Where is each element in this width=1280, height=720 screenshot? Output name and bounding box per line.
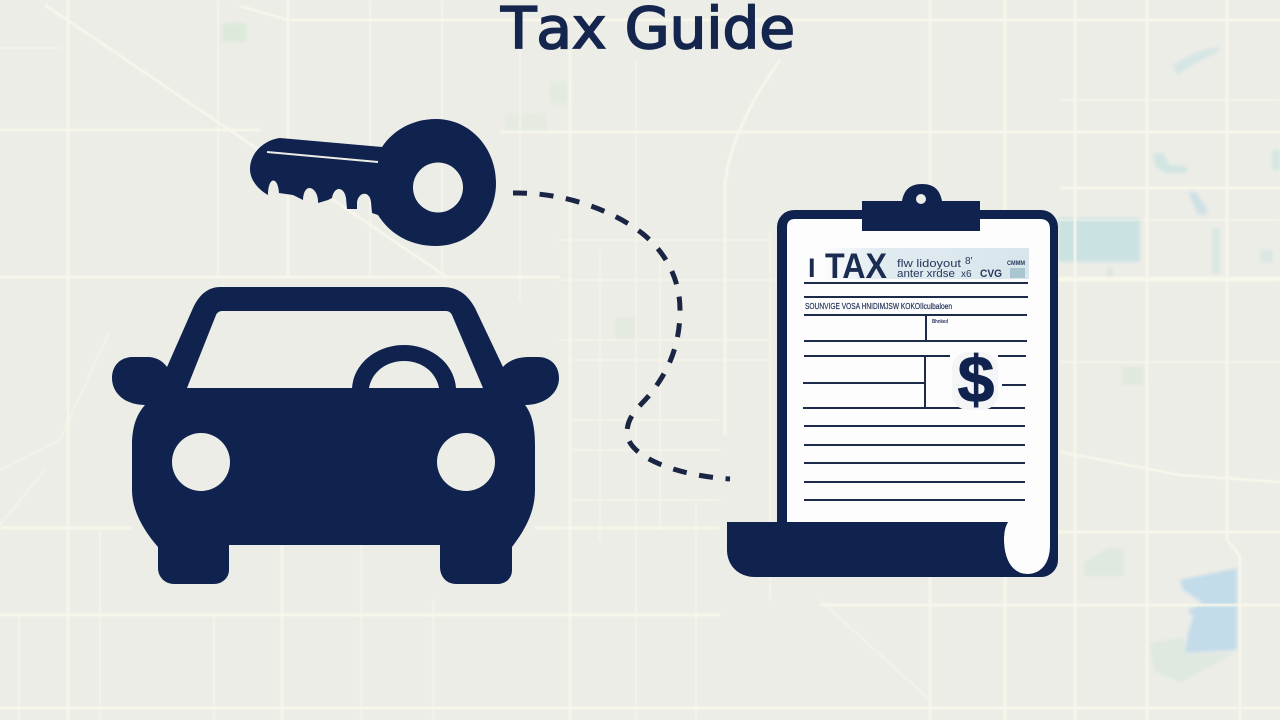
icon: clipboard with tax form (727, 184, 1058, 577)
arrow: dashed path from key to tax form (513, 193, 730, 479)
form header text: CMMM (1007, 261, 1025, 267)
form header text (897, 256, 1025, 280)
icon: car (112, 287, 559, 584)
form lines (803, 283, 1028, 500)
form header text: 8' (965, 256, 973, 267)
form header band (820, 248, 1029, 279)
form label: Bhnked (932, 319, 948, 325)
form header text: x6 (961, 269, 972, 280)
tax word: TAX (825, 247, 888, 286)
clipboard board (777, 210, 1058, 577)
form header text: CVG (980, 268, 1002, 280)
paper curl base (727, 522, 1027, 577)
form header text: flw lidoyout (897, 258, 961, 270)
clip hole (916, 194, 926, 204)
small header box (1010, 268, 1025, 278)
icon: key (250, 119, 496, 246)
tax heading: I (808, 253, 816, 283)
form subheading: SOUNVIGE VOSA HNIDIMJSW KOKOIIculbaloen (805, 301, 952, 311)
clip (862, 184, 980, 231)
form header text: anter xrdse (897, 268, 955, 280)
dollar sign: $ (958, 342, 994, 416)
paper sheet (787, 219, 1050, 574)
